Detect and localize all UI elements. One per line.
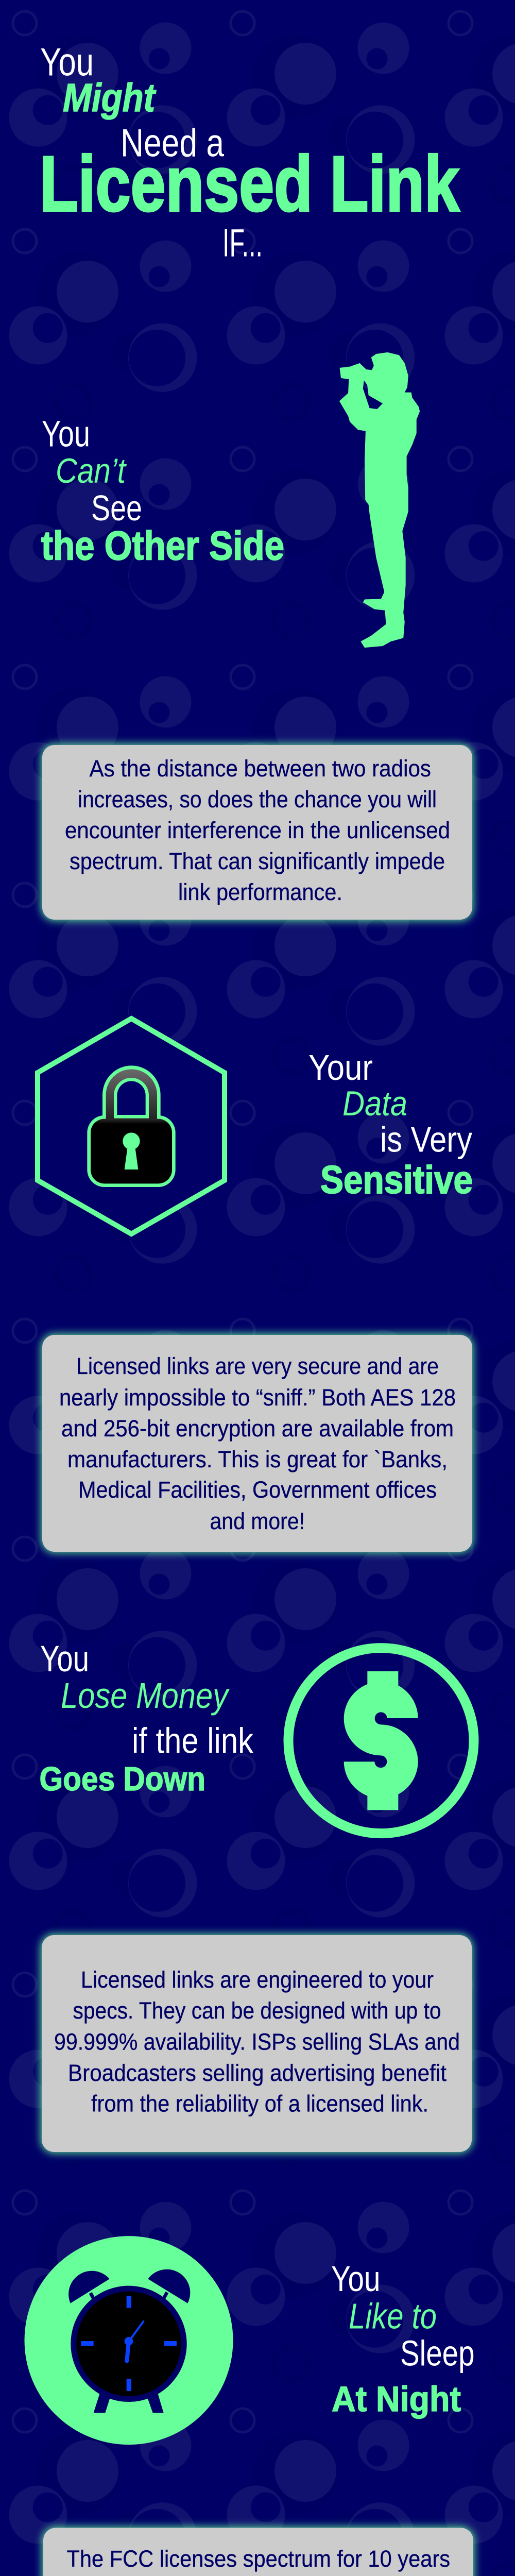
panel: FCC license callout: The FCC licenses spectrum for 10 years	[67, 2546, 450, 2572]
panel: security callout: and more!	[210, 1508, 305, 1534]
icon: alarm clock in circle	[25, 2236, 233, 2445]
heading: you can't see the other side: You	[42, 414, 90, 454]
heading: your data is very sensitive	[308, 1047, 473, 1202]
heading: you like to sleep at night: At Night	[332, 2379, 461, 2419]
heading: you like to sleep at night	[331, 2259, 475, 2419]
title: You	[40, 40, 94, 84]
heading: you lose money if the link goes down: if the link	[132, 1721, 254, 1761]
panel: security callout: Licensed links are very secure and are	[76, 1353, 439, 1379]
heading: your data is very sensitive: Your	[308, 1047, 373, 1088]
panel: security callout: manufacturers. This is great for `Banks,	[67, 1446, 448, 1472]
heading: you lose money if the link goes down	[39, 1639, 254, 1798]
panel: distance callout: encounter interference in the unlicensed	[65, 817, 450, 843]
heading: you can't see the other side	[41, 414, 284, 568]
panel: security callout	[41, 1334, 473, 1553]
heading: your data is very sensitive: Data	[342, 1084, 407, 1123]
panel: reliability callout: Broadcasters selling advertising benefit	[68, 2060, 447, 2086]
heading: your data is very sensitive: is Very	[380, 1119, 472, 1159]
icon: dollar sign in circle	[288, 1648, 474, 1834]
panel: security callout: and 256-bit encryption are available from	[61, 1415, 454, 1442]
icon: hexagon frame	[38, 1019, 225, 1234]
heading: you can't see the other side: the Other Side	[41, 522, 284, 568]
panel: reliability callout	[41, 1934, 473, 2153]
title: IF...	[222, 222, 263, 265]
panel: security callout: nearly impossible to “sniff.” Both AES 128	[59, 1384, 456, 1411]
title: Need a	[121, 122, 225, 165]
heading: you can't see the other side: Can’t	[56, 451, 127, 490]
panel: distance callout: spectrum. That can significantly impede	[70, 848, 445, 874]
icon: person with binoculars silhouette	[339, 352, 420, 648]
panel: reliability callout: specs. They can be designed with up to	[73, 1997, 441, 2024]
heading: you like to sleep at night: Like to	[349, 2296, 437, 2336]
heading: you like to sleep at night: Sleep	[400, 2333, 475, 2373]
panel: reliability callout: 99.999% availability. ISPs selling SLAs and	[54, 2029, 460, 2055]
panel: distance callout: increases, so does the chance you will	[78, 786, 437, 812]
heading: you lose money if the link goes down: Lose Money	[61, 1675, 230, 1716]
heading: you lose money if the link goes down: Goes Down	[39, 1760, 205, 1798]
panel: distance callout: link performance.	[178, 879, 342, 905]
panel: reliability callout: from the reliability of a licensed link.	[91, 2091, 428, 2116]
icon: padlock	[87, 1065, 176, 1187]
panel: distance callout: As the distance between two radios	[90, 755, 431, 782]
title: Might	[63, 76, 157, 120]
panel: security callout: Medical Facilities, Government offices	[78, 1477, 437, 1503]
heading: you like to sleep at night: You	[331, 2259, 380, 2299]
title	[40, 40, 459, 265]
heading: you lose money if the link goes down: You	[40, 1639, 89, 1680]
panel: distance callout	[41, 744, 473, 921]
heading: your data is very sensitive: Sensitive	[320, 1158, 473, 1202]
panel: FCC license callout	[42, 2527, 474, 2576]
heading: you can't see the other side: See	[91, 488, 142, 528]
panel: reliability callout: Licensed links are engineered to your	[81, 1967, 434, 1993]
